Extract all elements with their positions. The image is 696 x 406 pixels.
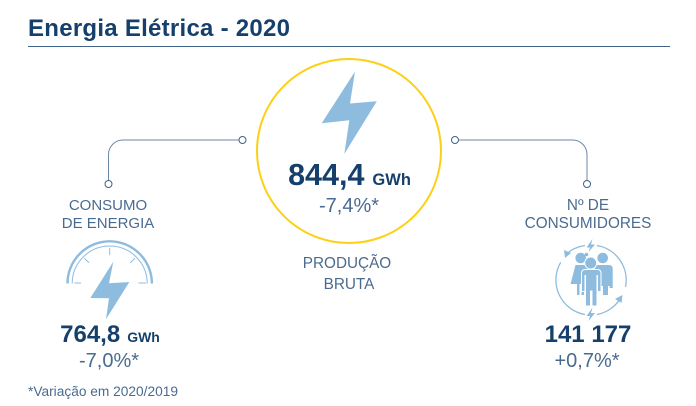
panel: nº de consumidores: CONSUMIDORES (525, 215, 651, 232)
label: Nº DE (567, 197, 609, 214)
footnote: *Variação em 2020/2019 (28, 384, 178, 399)
value: 844,4 GWh: 844,4 GWh (288, 158, 411, 192)
panel: produção bruta: BRUTA (324, 276, 375, 293)
panel: consumo de energia: DE ENERGIA (62, 215, 154, 232)
icon: lightning bolt (90, 262, 129, 319)
value: 141 177: 141 177 (545, 321, 631, 348)
title: Energia Elétrica - 2020 (28, 15, 290, 42)
label: PRODUÇÃO (303, 255, 391, 272)
icon: lightning bolt (322, 72, 377, 154)
icon: gauge (68, 241, 152, 284)
variation: -7,4%* (319, 195, 379, 217)
man right (593, 253, 613, 295)
woman (570, 253, 591, 295)
variation: -7,0%* (79, 350, 139, 372)
icon: consumers (556, 239, 626, 321)
variation: +0,7%* (554, 350, 620, 372)
yellow circle (257, 59, 441, 243)
cycle arrows (556, 246, 626, 314)
connector: right (452, 136, 590, 188)
panel: produção bruta (257, 59, 441, 293)
value: 764,8 GWh: 764,8 GWh (60, 321, 160, 348)
panel: consumo de energia (60, 197, 160, 372)
man centre (582, 257, 601, 306)
label: CONSUMO (69, 197, 147, 214)
connector: left (105, 136, 246, 188)
panel: nº de consumidores (525, 197, 651, 372)
